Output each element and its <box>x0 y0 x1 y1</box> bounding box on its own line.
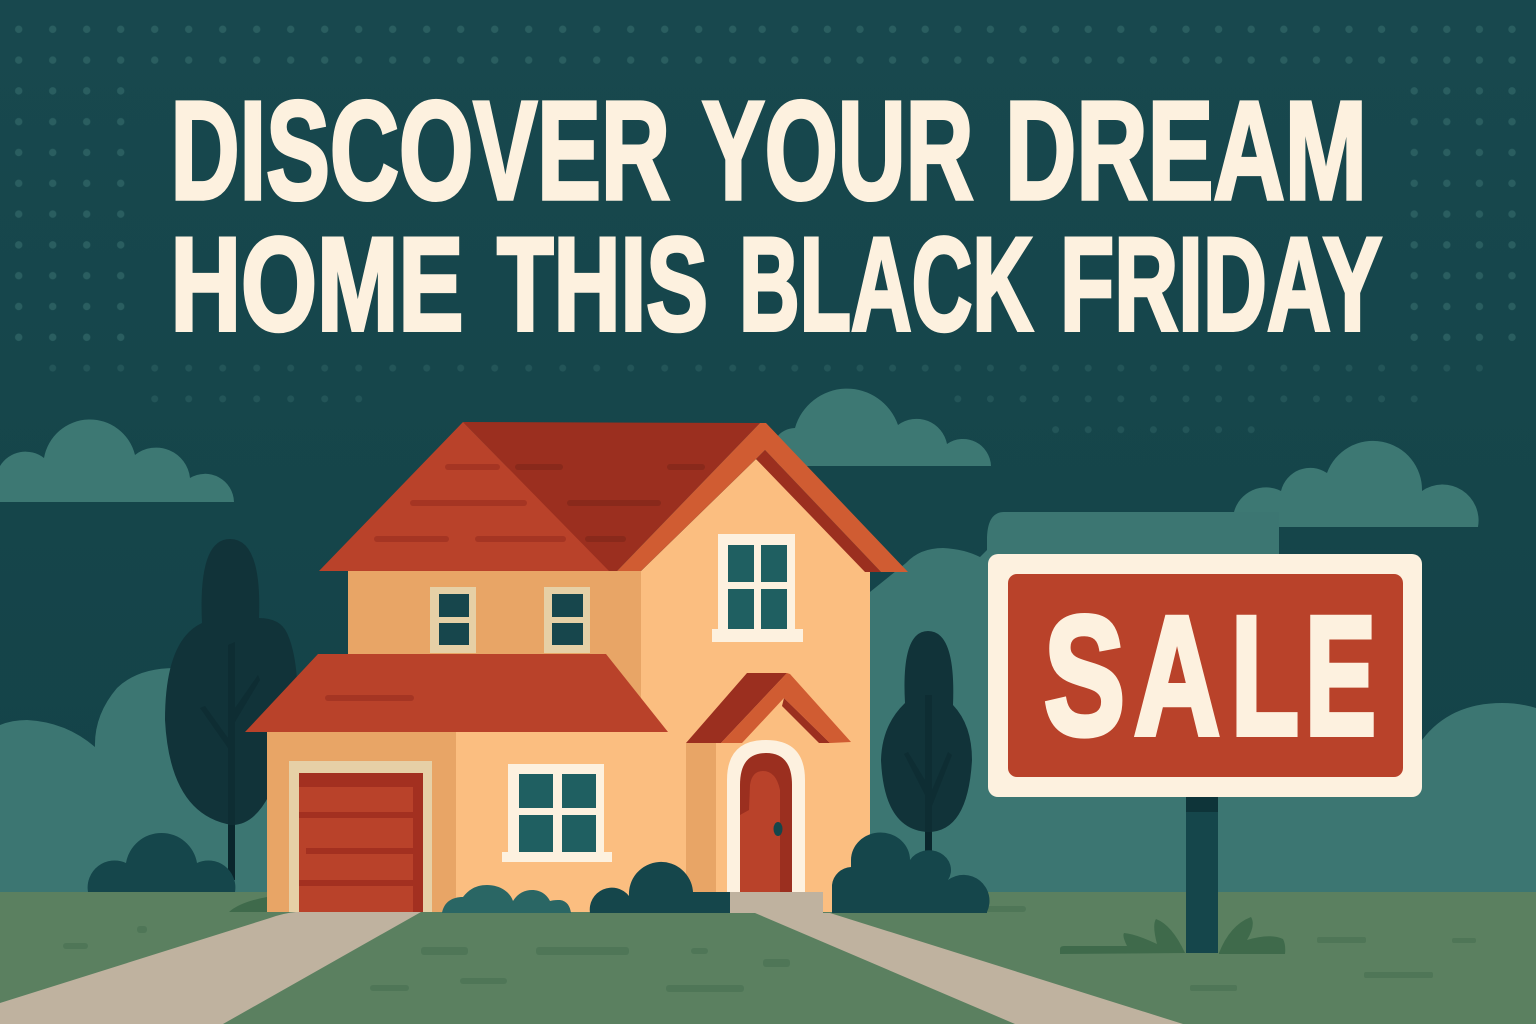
house shadow <box>229 897 267 912</box>
door panel <box>740 753 792 892</box>
title line 1 <box>170 72 1367 229</box>
lower roof <box>245 654 668 732</box>
sign text: A <box>1134 581 1220 770</box>
dot pattern <box>0 14 1536 445</box>
tree branches <box>200 642 260 825</box>
driveway <box>0 912 421 1024</box>
door light panel <box>740 771 780 892</box>
title line 2: THIS <box>497 211 708 359</box>
roof shingle marks <box>374 464 566 542</box>
tree crown <box>165 539 297 825</box>
garage door lines <box>299 773 423 912</box>
title line 1: DREAM <box>1005 72 1367 229</box>
lower window <box>502 764 612 862</box>
cloud left <box>0 419 234 502</box>
hills right <box>860 512 1536 892</box>
title line 2 <box>170 211 1382 359</box>
sign post <box>1186 790 1218 953</box>
bush left <box>88 833 235 892</box>
sign text: S <box>1044 581 1125 770</box>
tree left <box>165 539 297 880</box>
door step <box>730 892 823 913</box>
title line 1: DISCOVER <box>170 72 670 229</box>
post shadow <box>1186 796 1218 812</box>
tree trunk <box>228 825 235 880</box>
sign board <box>988 554 1422 797</box>
sign panel <box>1008 574 1403 777</box>
title line 1: YOUR <box>702 72 974 229</box>
gable fascia <box>617 423 908 572</box>
cloud center <box>777 389 991 466</box>
tree trunk <box>925 832 932 853</box>
porch roof <box>686 673 851 743</box>
upper small window right <box>544 587 590 653</box>
cloud right <box>1234 441 1479 527</box>
hills left <box>0 668 270 892</box>
door knob <box>774 822 782 836</box>
door arch <box>727 740 805 892</box>
tree branches <box>904 695 952 832</box>
sign text: E <box>1305 581 1376 770</box>
front door <box>727 740 805 892</box>
main roof front side <box>319 422 609 571</box>
title line 2: HOME <box>170 211 464 359</box>
sign text: L <box>1231 581 1299 770</box>
main roof dark side <box>463 422 760 571</box>
lawn <box>0 892 1536 1024</box>
garage <box>289 761 432 912</box>
front walkway <box>755 913 1183 1024</box>
roof dark side marks <box>515 464 705 542</box>
title <box>170 72 1382 359</box>
bush dark right <box>832 833 990 913</box>
garage door <box>299 773 423 912</box>
porch side shade <box>686 743 716 892</box>
title line 2: FRIDAY <box>1060 211 1382 359</box>
bush dark center <box>590 862 730 913</box>
house <box>245 422 990 913</box>
bush teal <box>442 885 571 913</box>
tree right <box>881 631 972 853</box>
lawn marks <box>63 906 1476 992</box>
garage frame <box>289 761 432 912</box>
upper small window left <box>430 587 476 653</box>
title line 2: BLACK <box>739 211 1033 359</box>
lower wall shaded <box>267 732 456 912</box>
sign text <box>1044 581 1376 770</box>
lower roof mark <box>325 695 414 701</box>
grass tufts <box>1060 917 1285 954</box>
sale sign <box>988 554 1422 954</box>
gable window <box>712 534 803 642</box>
lower wall light <box>456 732 870 912</box>
gabled wall light <box>641 459 870 912</box>
upper wall shaded <box>348 571 641 700</box>
tree crown <box>881 631 972 832</box>
gable inner band <box>756 450 881 572</box>
